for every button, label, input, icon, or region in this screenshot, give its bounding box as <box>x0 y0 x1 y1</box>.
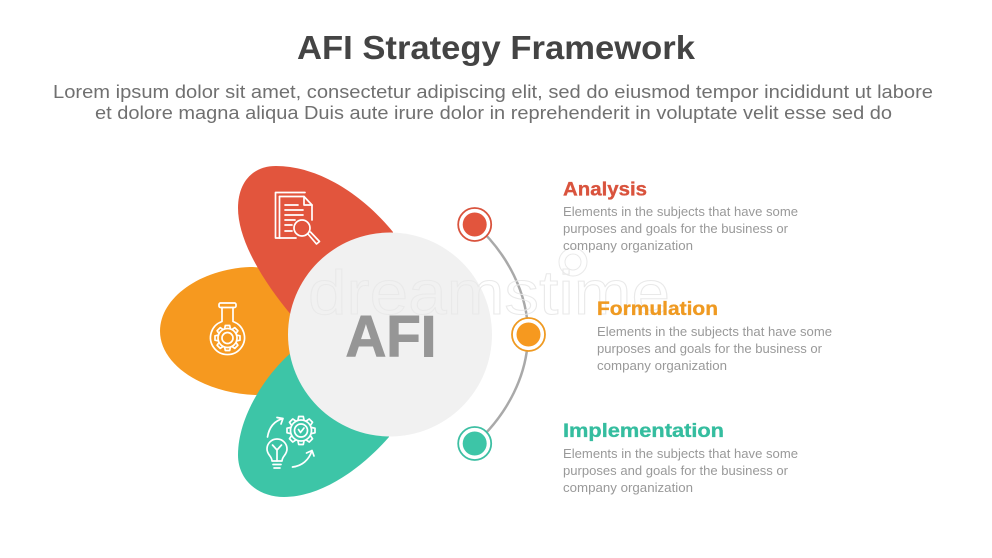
text block: implementation: Implementation <box>563 420 724 442</box>
text block: implementation: purposes and goals for the business or <box>563 463 789 478</box>
subtitle: Lorem ipsum dolor sit amet, consectetur adipiscing elit, sed do eiusmod tempor incididunt ut labore <box>53 82 933 102</box>
center circle <box>288 232 492 436</box>
node: analysis <box>458 208 491 241</box>
connector arc <box>475 224 528 444</box>
text block: implementation <box>563 420 798 495</box>
petal: orange <box>160 267 320 395</box>
text block: analysis: Elements in the subjects that have some <box>563 204 798 219</box>
text block: formulation: company organization <box>597 358 727 373</box>
text block: formulation: Elements in the subjects that have some <box>597 324 832 339</box>
icon: gear, bulb and arrows <box>267 416 315 468</box>
text block: analysis: purposes and goals for the business or <box>563 221 789 236</box>
node: formulation <box>512 318 545 351</box>
text block: analysis: Analysis <box>563 178 647 200</box>
watermark: dreamstime <box>308 259 670 328</box>
text block: formulation: purposes and goals for the business or <box>597 341 823 356</box>
subtitle <box>53 82 933 123</box>
text block: formulation: Formulation <box>597 298 718 320</box>
text block: analysis: company organization <box>563 238 693 253</box>
node: implementation <box>458 427 491 460</box>
text block: implementation: company organization <box>563 480 693 495</box>
text block: analysis <box>563 178 798 253</box>
icon: flask with gear <box>210 303 244 355</box>
title: AFI Strategy Framework <box>297 29 696 66</box>
text block: formulation <box>597 298 832 373</box>
icon: document with magnifier <box>276 192 320 244</box>
text block: implementation: Elements in the subjects that have some <box>563 446 798 461</box>
subtitle: et dolore magna aliqua Duis aute irure dolor in reprehenderit in voluptate velit esse sed do <box>95 103 892 123</box>
petal: red <box>238 166 393 316</box>
petal: teal <box>238 352 393 497</box>
center label: AFI <box>346 304 436 370</box>
panel: petal diagram <box>160 166 492 497</box>
